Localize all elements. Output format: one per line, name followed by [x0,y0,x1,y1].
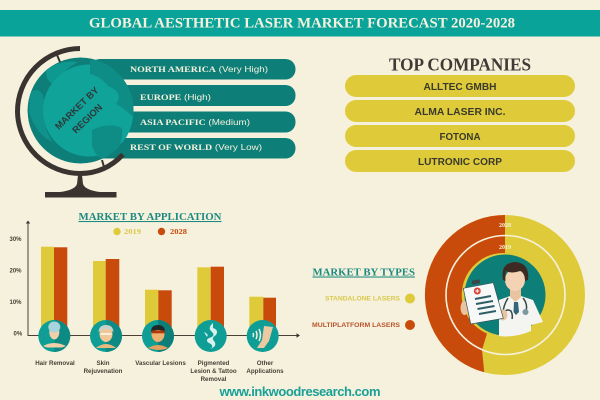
legend: multiplatform: MULTIPLATFORM LASERS [312,322,401,329]
heading: MARKET BY APPLICATION [78,212,222,223]
icon: skin rejuvenation [90,320,122,352]
category labels: Vascular Lesions [135,360,186,367]
icon: tattoo removal [195,320,227,352]
donut chart: 2019 [499,245,511,251]
icon: doctor [460,262,543,336]
company: lutronic [345,150,575,172]
panel: market by application [10,212,300,383]
region: europe: EUROPE (High) [140,92,211,102]
category labels: Pigmented [198,360,230,367]
company: alma [345,100,575,122]
region bars [90,59,296,158]
category labels: Hair Removal [35,360,75,367]
globe label: REGION [70,102,105,136]
bar chart [41,247,276,336]
company: fotona: FOTONA [440,132,480,143]
chart axes [26,220,300,338]
website url: www.inkwoodresearch.com [218,384,380,399]
heading: TOP COMPANIES [389,54,531,74]
globe [28,58,136,164]
legend: multiplatform [312,320,415,330]
panel: market by types [312,215,585,375]
legend: 2028 [170,227,187,236]
region: asia pacific: ASIA PACIFIC (Medium) [140,117,250,127]
company: lutronic: LUTRONIC CORP [418,157,502,168]
category labels: Skin [96,360,110,367]
category labels: Applications [246,368,284,375]
category labels [35,360,284,383]
y axis labels: 30% [10,237,22,243]
company: fotona [345,125,575,147]
panel: top companies [345,54,575,172]
globe stand [17,48,123,198]
legend: standalone [325,294,415,304]
company: alma: ALMA LASER INC. [414,107,506,118]
panel: market by region [17,48,295,198]
icon: vascular lesions [142,320,174,352]
legend: standalone: STANDALONE LASERS [325,296,401,302]
company: alltec [345,75,575,97]
legend: 2019 [124,227,141,236]
category labels: Lesion & Tattoo [190,368,237,375]
region: rest of world: REST OF WORLD (Very Low) [130,142,262,152]
icon: hair removal [38,320,70,352]
globe label: MARKET BY [53,85,102,132]
y axis labels: 10% [10,300,22,306]
title banner: GLOBAL AESTHETIC LASER MARKET FORECAST 2020-2028 [89,16,515,32]
company: alltec: ALLTEC GMBH [424,82,496,93]
category labels: Removal [201,376,227,383]
category labels: Rejuvenation [84,368,123,375]
y axis labels: 20% [10,268,22,274]
heading: MARKET BY TYPES [312,268,415,278]
legend [113,227,187,236]
region: north america: NORTH AMERICA (Very High) [130,64,268,74]
donut chart: 2028 [499,223,511,229]
title banner [0,10,600,36]
y axis labels: 0% [14,332,23,338]
icon: other applications [247,320,279,352]
donut chart [425,215,585,375]
y axis labels [10,237,23,338]
category labels: Other [257,360,274,367]
